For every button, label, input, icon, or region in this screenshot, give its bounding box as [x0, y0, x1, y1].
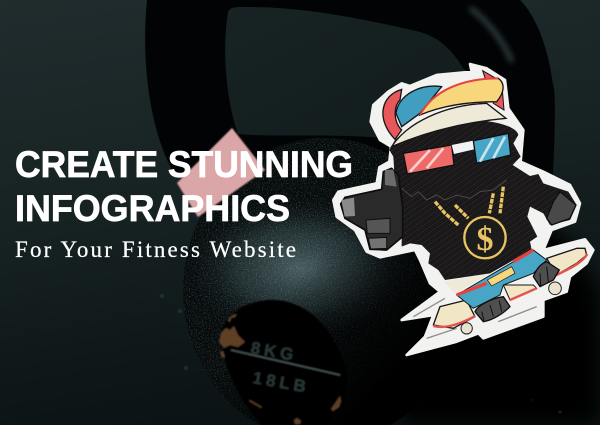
pointing hand: [341, 168, 403, 250]
kettlebell handle: [145, 0, 555, 210]
left foot: [475, 297, 510, 322]
kettlebell body: [183, 138, 467, 425]
pink tape on handle: [177, 128, 265, 217]
furry body: [389, 120, 577, 280]
title: INFOGRAPHICS: [15, 188, 290, 229]
cap: [392, 78, 506, 147]
gold chain: [435, 187, 503, 225]
dollar medallion: $: [476, 221, 493, 258]
stamped weight label: 8KG: [249, 338, 299, 365]
dollar medallion: [464, 217, 506, 258]
title: CREATE STUNNING: [15, 144, 353, 185]
subtitle: For Your Fitness Website: [15, 237, 296, 262]
horn left: [383, 89, 402, 139]
handle reflection: [470, 8, 512, 62]
shorts: [443, 250, 547, 308]
bottom right shadow: [400, 230, 600, 425]
base stamp with rust: 18LB: [251, 368, 311, 397]
title: [15, 144, 353, 229]
right hand: [547, 192, 576, 225]
horn right: [483, 71, 504, 110]
speed lines: [413, 298, 537, 338]
sticker outline: [333, 64, 593, 355]
base stamp with rust: [219, 300, 348, 425]
glasses: [403, 133, 511, 174]
skateboard: [433, 248, 587, 334]
right foot: [533, 262, 559, 287]
mascot sticker: [333, 64, 593, 355]
bokeh dots: [160, 294, 562, 414]
head fur fringe: [402, 180, 507, 200]
